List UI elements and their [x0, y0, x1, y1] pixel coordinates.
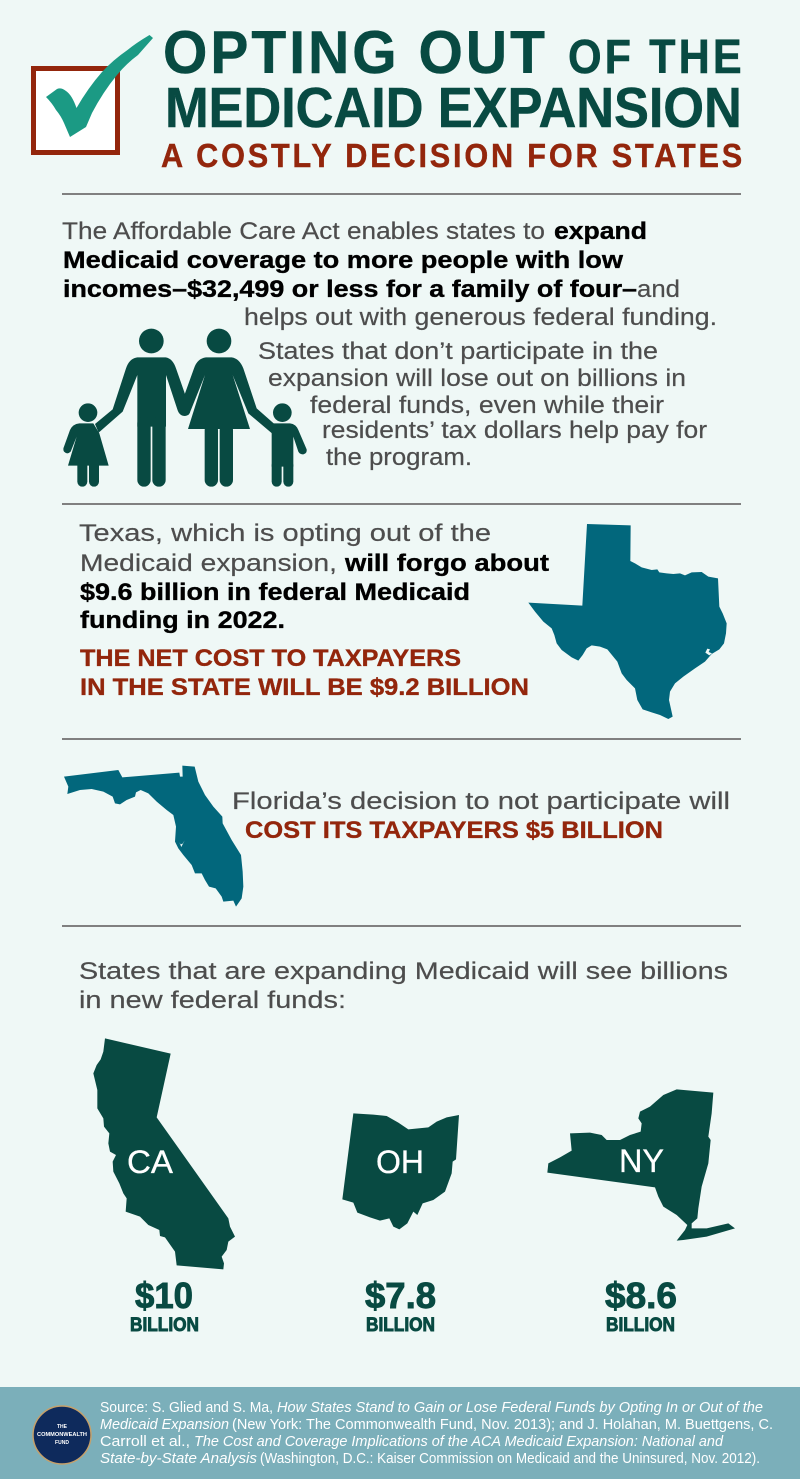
logo: The Commonwealth Fund — [33, 1406, 91, 1464]
stat: California $10 billion: $10 — [135, 1275, 193, 1316]
icon: family of four holding hands — [63, 329, 307, 487]
map: California — [93, 1038, 235, 1269]
callout: Texas net cost: THE NET COST TO TAXPAYERS — [80, 645, 461, 672]
text block: Texas funding: funding in 2022. — [80, 607, 285, 634]
text block: ACA intro: helps out with generous federal funding. — [244, 304, 717, 331]
text block: ACA intro — [62, 218, 717, 331]
panel: Texas — [79, 520, 727, 719]
heading: expanding states: States that are expanding Medicaid will see billions — [79, 958, 728, 985]
text block: states that do not participate — [258, 338, 707, 471]
text block: states that do not participate: federal funds, even while their — [310, 392, 664, 419]
panel: expanding states — [79, 958, 735, 1336]
text block: Florida cost — [232, 788, 730, 844]
text block: states that do not participate: expansion will lose out on billions in — [268, 365, 686, 392]
icon: checked box — [34, 35, 153, 152]
stat: New York $8.6 billion: $8.6 — [605, 1275, 677, 1316]
callout: Texas net cost — [80, 645, 529, 701]
text block: Texas funding — [79, 520, 549, 634]
text block: ACA intro: Medicaid coverage to more people with low — [63, 247, 623, 274]
panel: footer source — [0, 1387, 800, 1479]
text block: source citation: Carroll et al., — [100, 1433, 190, 1450]
text block: Texas funding: Texas, which is opting out of the — [79, 520, 491, 547]
subtitle: A COSTLY DECISION FOR STATES — [161, 137, 742, 174]
stat: Ohio $7.8 billion: BILLION — [366, 1315, 435, 1336]
panel: header — [34, 20, 742, 174]
text block: source citation: How States Stand to Gain or Lose Federal Funds by Opting In or Out of the — [277, 1399, 763, 1416]
text block: Florida cost: COST ITS TAXPAYERS $5 BILLION — [245, 817, 663, 844]
callout: Texas net cost: IN THE STATE WILL BE $9.2 BILLION — [80, 674, 529, 701]
text block: source citation: Medicaid Expansion — [100, 1416, 229, 1433]
text block: Florida cost: Florida’s decision to not participate will — [232, 788, 730, 815]
stat: Ohio $7.8 billion — [365, 1275, 436, 1336]
title: OF THE — [568, 30, 742, 84]
text block: states that do not participate: the program. — [326, 444, 472, 471]
title: OPTING OUT — [163, 20, 545, 86]
logo: The Commonwealth Fund: FUND — [55, 1440, 69, 1446]
text block: states that do not participate: residents’ tax dollars help pay for — [322, 417, 707, 444]
text block: source citation: (Washington, D.C.: Kaiser Commission on Medicaid and the Uninsured, Nov. 2012). — [260, 1450, 760, 1467]
stat: Ohio $7.8 billion: $7.8 — [365, 1275, 436, 1316]
logo: The Commonwealth Fund: THE — [57, 1424, 68, 1430]
stat: New York $8.6 billion — [605, 1275, 677, 1336]
text block: Texas funding: Medicaid expansion, — [80, 550, 337, 577]
stat: New York $8.6 billion: BILLION — [606, 1315, 675, 1336]
text block: ACA intro: The Affordable Care Act enables states to — [62, 218, 545, 245]
panel: Florida — [64, 766, 730, 907]
title — [163, 20, 742, 139]
text block: source citation: State-by-State Analysis — [100, 1450, 257, 1467]
title: MEDICAID EXPANSION — [165, 75, 742, 139]
text block: Texas funding: $9.6 billion in federal Medicaid — [80, 579, 470, 606]
text block: ACA intro: and — [637, 276, 680, 303]
text block: source citation: Source: S. Glied and S. Ma, — [100, 1399, 273, 1416]
heading: expanding states — [79, 958, 728, 1014]
text block: ACA intro: expand — [554, 218, 647, 245]
map: Ohio: OH — [376, 1144, 424, 1180]
heading: expanding states: in new federal funds: — [79, 987, 346, 1014]
map: Florida — [64, 766, 243, 907]
map: New York: NY — [619, 1143, 664, 1179]
text block: states that do not participate: States that don’t participate in the — [258, 338, 658, 365]
map: Texas — [528, 524, 727, 719]
map: New York — [547, 1089, 735, 1241]
text block: source citation: (New York: The Commonwealth Fund, Nov. 2013); and J. Holahan, M. Buettgens, C. — [232, 1416, 773, 1433]
logo: The Commonwealth Fund: COMMONWEALTH — [37, 1432, 87, 1438]
text block: Texas funding: will forgo about — [344, 550, 549, 577]
panel: introduction — [62, 218, 717, 487]
map: California: CA — [127, 1144, 174, 1180]
text block: source citation: The Cost and Coverage Implications of the ACA Medicaid Expansion: National and — [194, 1433, 724, 1450]
stat: California $10 billion — [130, 1275, 199, 1336]
text block: ACA intro: incomes–$32,499 or less for a family of four– — [63, 276, 637, 303]
text block: source citation — [100, 1399, 773, 1467]
stat: California $10 billion: BILLION — [130, 1315, 199, 1336]
map: Ohio — [342, 1113, 459, 1229]
